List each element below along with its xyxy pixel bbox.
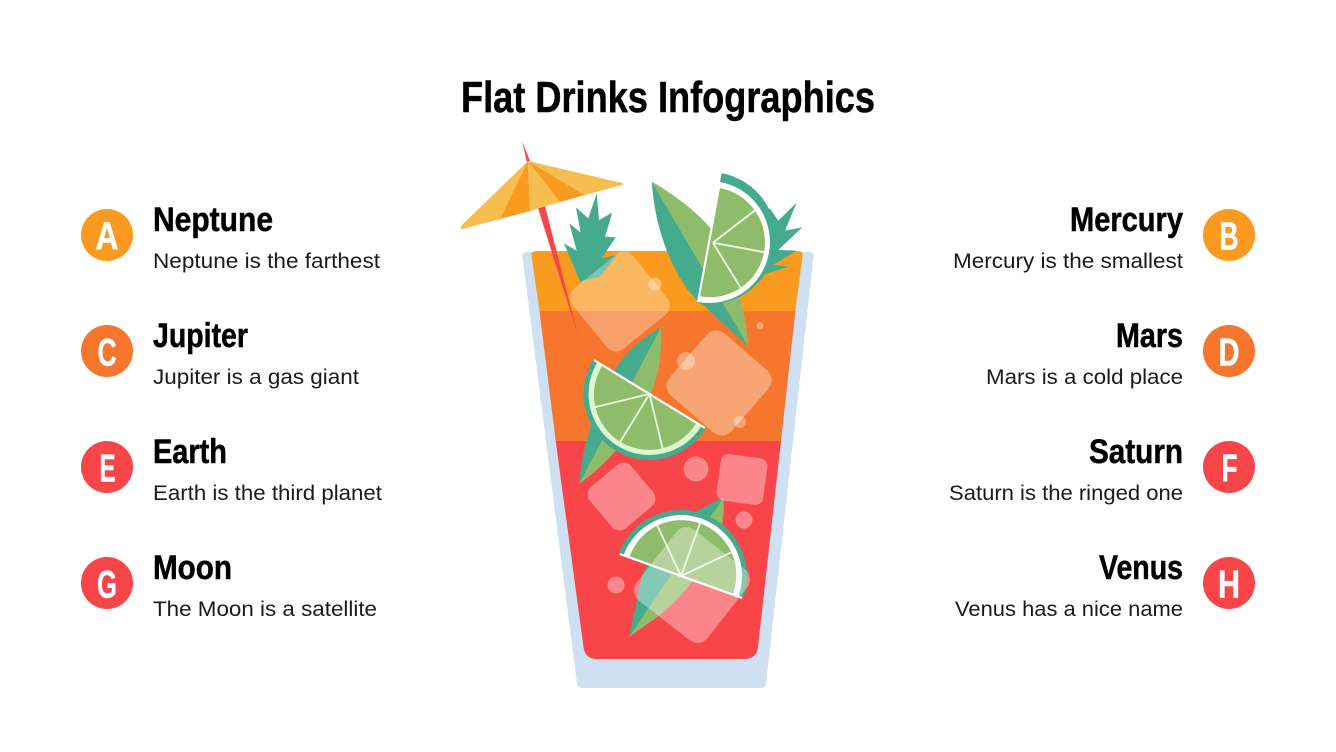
ice cube five xyxy=(629,522,755,648)
glass xyxy=(522,252,814,688)
item F: Saturn xyxy=(949,433,1255,505)
item B: Mercury xyxy=(953,201,1255,273)
item G: Moon: Moon xyxy=(153,549,232,587)
item B: Mercury: Mercury is the smallest xyxy=(953,249,1183,273)
item F: Saturn: F xyxy=(1222,448,1238,490)
item E: Earth: E xyxy=(100,448,116,490)
spiky leaf right xyxy=(740,203,802,297)
drink: bottom red layer xyxy=(556,441,781,659)
item D: Mars: Mars is a cold place xyxy=(986,365,1183,389)
cocktail glass illustration xyxy=(461,141,814,688)
item H: Venus: H xyxy=(1218,564,1240,606)
lime slice bottom xyxy=(619,492,765,598)
lime slice top xyxy=(698,173,787,315)
item E: Earth xyxy=(81,433,382,505)
bubbles xyxy=(608,278,764,594)
item H: Venus xyxy=(955,549,1255,621)
item B: Mercury: B xyxy=(1220,216,1238,258)
item D: Mars xyxy=(986,317,1255,389)
spiky leaf left xyxy=(564,193,617,282)
item A: Neptune: Neptune xyxy=(153,201,273,239)
ice cube two xyxy=(661,325,777,441)
item D: Mars: D xyxy=(1218,332,1240,374)
item H: Venus: Venus has a nice name xyxy=(955,597,1183,621)
lime slice middle xyxy=(559,360,706,485)
item A: Neptune: Neptune is the farthest xyxy=(153,249,380,273)
ice cube three xyxy=(583,458,660,535)
cocktail umbrella xyxy=(461,141,624,336)
item G: Moon xyxy=(81,549,377,621)
item B: Mercury: Mercury xyxy=(1070,201,1183,239)
drink: top orange layer xyxy=(531,251,803,311)
item E: Earth: Earth is the third planet xyxy=(153,481,382,505)
large mint leaf xyxy=(652,182,748,347)
title: Flat Drinks Infographics xyxy=(461,73,875,122)
item H: Venus: Venus xyxy=(1099,549,1183,587)
mint leaf middle xyxy=(579,327,661,484)
item F: Saturn: Saturn is the ringed one xyxy=(949,481,1183,505)
item G: Moon: G xyxy=(97,564,117,606)
ice cube one xyxy=(565,247,675,356)
drink: middle orange layer xyxy=(540,311,795,441)
item C: Jupiter: C xyxy=(98,332,116,374)
item G: Moon: The Moon is a satellite xyxy=(153,597,377,621)
item F: Saturn: Saturn xyxy=(1089,433,1183,471)
item D: Mars: Mars xyxy=(1116,317,1183,355)
item C: Jupiter: Jupiter xyxy=(153,317,248,355)
item A: Neptune: A xyxy=(96,216,118,258)
ice cube four xyxy=(715,453,769,506)
item C: Jupiter xyxy=(81,317,359,389)
mint leaf bottom xyxy=(629,498,724,637)
item A: Neptune xyxy=(81,201,380,273)
item C: Jupiter: Jupiter is a gas giant xyxy=(153,365,359,389)
item E: Earth: Earth xyxy=(153,433,227,471)
